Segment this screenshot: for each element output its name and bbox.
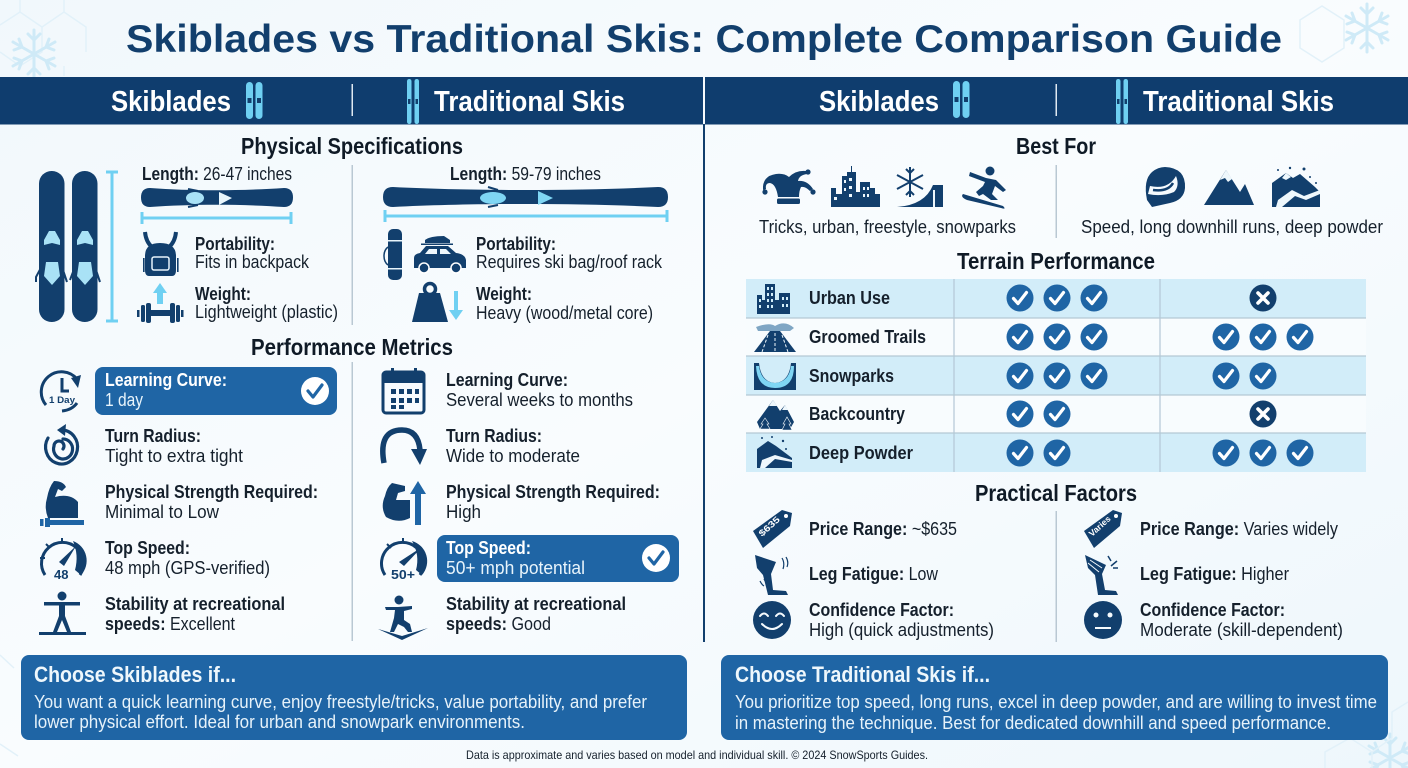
callout: choose skiblades: Choose Skiblades if... <box>34 662 236 687</box>
icon: tired leg <box>1085 555 1118 595</box>
icon: price tag skiblades <box>753 510 792 548</box>
icon: neutral face <box>1084 601 1122 639</box>
callout: choose traditional skis: Choose Traditional Skis if... <box>735 662 990 687</box>
callout: traditional top speed <box>437 535 679 582</box>
table: terrain performance <box>746 279 1366 472</box>
text: stability: speeds: Excellent <box>105 614 235 634</box>
header bar: left: Skiblades <box>111 86 231 118</box>
icon: balancing skier <box>378 596 428 640</box>
text: skiblades best for: Tricks, urban, freestyle, snowparks <box>759 217 1016 237</box>
callout: choose skiblades <box>21 655 687 740</box>
text: skiblade length: Length: 26-47 inches <box>142 164 292 184</box>
row: snowparks <box>746 356 1366 395</box>
row: backcountry: Backcountry <box>809 404 905 424</box>
icon: smiling face <box>753 601 791 639</box>
callout: choose skiblades: lower physical effort. Ideal for urban and snowpark environments. <box>34 712 525 732</box>
callout: choose traditional skis <box>721 655 1388 740</box>
row: groomed trails <box>746 318 1366 356</box>
text: top speed: Top Speed: <box>105 538 190 558</box>
header bar: right: Skiblades <box>819 86 939 118</box>
header bar: left: Traditional Skis <box>434 86 625 118</box>
row: backcountry <box>746 395 1366 433</box>
text: weight: Weight: <box>195 284 251 304</box>
icon: 1 day clock <box>41 372 81 411</box>
callout: skiblades learning curve: Learning Curve: <box>105 370 227 390</box>
icon: mountain <box>1204 170 1254 205</box>
icon: vertical skiblades <box>36 171 118 322</box>
callout: traditional top speed: 50+ mph potential <box>446 558 585 578</box>
callout: traditional top speed: Top Speed: <box>446 538 531 558</box>
icon: jester hat <box>762 169 816 204</box>
row: deep powder: Deep Powder <box>809 443 913 463</box>
right panel: usage and terrain <box>705 77 1408 642</box>
icon: city skyline <box>831 166 880 207</box>
text: portability <box>195 234 310 272</box>
icon: price tag skiblades: $635 <box>757 514 782 538</box>
heading: practical factors: Practical Factors <box>975 480 1137 506</box>
icon: tight turn spiral <box>46 424 78 464</box>
text: traditional weight: Weight: <box>476 284 532 304</box>
icon: large bicep with arrow <box>383 481 426 525</box>
text: stability <box>105 594 285 634</box>
icon: speedometer 48: 48 <box>54 567 68 582</box>
text: physical strength: Physical Strength Required: <box>105 482 318 502</box>
text: traditional portability: Portability: <box>476 234 556 254</box>
text: traditional weight: Heavy (wood/metal core) <box>476 303 653 323</box>
text: traditional learning curve <box>446 370 633 410</box>
text: physical strength <box>105 482 318 522</box>
text: physical strength: Minimal to Low <box>105 502 220 522</box>
icon: stable skier <box>39 592 86 635</box>
text: confidence traditional: Moderate (skill-dependent) <box>1140 620 1343 640</box>
footer note: Data is approximate and varies based on model and individual skill. © 2024 SnowSports Guides. <box>466 748 928 762</box>
text: price traditional: Price Range: Varies widely <box>1140 519 1338 539</box>
header bar: left <box>0 77 703 124</box>
header bar: right <box>705 77 1408 124</box>
text: top speed: 48 mph (GPS-verified) <box>105 558 270 578</box>
row: urban use: Urban Use <box>809 288 890 308</box>
text: traditional turn radius: Wide to moderate <box>446 446 580 466</box>
row: groomed trails: Groomed Trails <box>809 327 926 347</box>
callout: choose skiblades: You want a quick learning curve, enjoy freestyle/tricks, value portability, and prefer <box>34 692 647 712</box>
icon: speedometer 48 <box>40 538 87 582</box>
text: traditional best for: Speed, long downhill runs, deep powder <box>1081 217 1383 237</box>
text: weight: Lightweight (plastic) <box>195 302 338 322</box>
text: fatigue skiblades: Leg Fatigue: Low <box>809 564 939 584</box>
icon: snowflake and jump ramp <box>897 167 943 207</box>
icon: backpack <box>143 232 179 276</box>
text: confidence skiblades: High (quick adjustments) <box>809 620 994 640</box>
text: traditional weight <box>476 284 653 323</box>
text: traditional learning curve: Several weeks to months <box>446 390 633 410</box>
text: traditional stability: speeds: Good <box>446 614 551 634</box>
icon: calendar <box>383 368 424 413</box>
text: price skiblades: Price Range: ~$635 <box>809 519 957 539</box>
heading: performance metrics: Performance Metrics <box>251 334 453 360</box>
icon: long ski with length bracket <box>383 187 668 222</box>
text: traditional learning curve: Learning Curve: <box>446 370 568 390</box>
text: fatigue traditional: Leg Fatigue: Higher <box>1140 564 1289 584</box>
icon: short ski with length bracket <box>141 188 293 224</box>
title: Skiblades vs Traditional Skis: Complete Comparison Guide <box>126 18 1282 61</box>
text: traditional portability <box>476 234 663 272</box>
header bar: right: Traditional Skis <box>1143 86 1334 118</box>
left panel: specs and metrics <box>0 77 705 642</box>
icon: 1 day clock: 1 Day <box>49 395 76 406</box>
callout: skiblades learning curve: 1 day <box>105 390 143 410</box>
callout: skiblades learning curve <box>95 367 337 415</box>
icon: small bicep <box>40 481 84 527</box>
icon: dumbbell with up arrow <box>137 283 184 323</box>
heading: best for: Best For <box>1016 133 1096 159</box>
text: portability: Portability: <box>195 234 275 254</box>
row: urban use <box>746 279 1366 318</box>
text: confidence skiblades <box>809 600 994 640</box>
text: stability: Stability at recreational <box>105 594 285 614</box>
icon: price tag traditional <box>1084 510 1122 548</box>
icon: deep powder mountain <box>1272 167 1320 207</box>
text: turn radius <box>105 426 243 466</box>
text: traditional portability: Requires ski bag/roof rack <box>476 252 663 272</box>
text: traditional turn radius <box>446 426 580 466</box>
text: traditional strength: High <box>446 502 481 522</box>
text: traditional strength: Physical Strength Required: <box>446 482 660 502</box>
icon: car with roof rack <box>414 236 466 273</box>
text: top speed <box>105 538 270 578</box>
text: traditional stability: Stability at recreational <box>446 594 626 614</box>
icon: speedometer 50+ <box>382 538 427 582</box>
text: confidence traditional <box>1140 600 1343 640</box>
text: turn radius: Tight to extra tight <box>105 446 243 466</box>
text: confidence skiblades: Confidence Factor: <box>809 600 954 620</box>
row: deep powder <box>746 433 1366 472</box>
icon: speedometer 50+: 50+ <box>391 568 415 582</box>
icon: heavy weight with down arrow <box>412 284 463 322</box>
text: turn radius: Turn Radius: <box>105 426 201 446</box>
callout: choose traditional skis: in mastering the technique. Best for dedicated downhill and speed performance. <box>735 713 1331 733</box>
row: snowparks: Snowparks <box>809 366 894 386</box>
text: weight <box>195 284 338 322</box>
icon: relaxed leg <box>755 555 788 595</box>
text: traditional length: Length: 59-79 inches <box>450 164 601 184</box>
icon: snowboarder <box>962 166 1006 209</box>
text: traditional strength <box>446 482 660 522</box>
icon: helmet <box>1146 167 1185 207</box>
icon: wide turn arc <box>383 430 427 465</box>
text: portability: Fits in backpack <box>195 252 310 272</box>
text: traditional turn radius: Turn Radius: <box>446 426 542 446</box>
icon: price tag traditional: Varies <box>1087 513 1113 538</box>
callout: choose traditional skis: You prioritize top speed, long runs, excel in deep powder, and are willing to invest time <box>735 692 1377 712</box>
icon: ski bag <box>384 229 402 280</box>
heading: terrain performance: Terrain Performance <box>957 248 1155 274</box>
heading: physical specifications: Physical Specifications <box>241 133 463 159</box>
text: traditional stability <box>446 594 626 634</box>
text: confidence traditional: Confidence Factor: <box>1140 600 1285 620</box>
